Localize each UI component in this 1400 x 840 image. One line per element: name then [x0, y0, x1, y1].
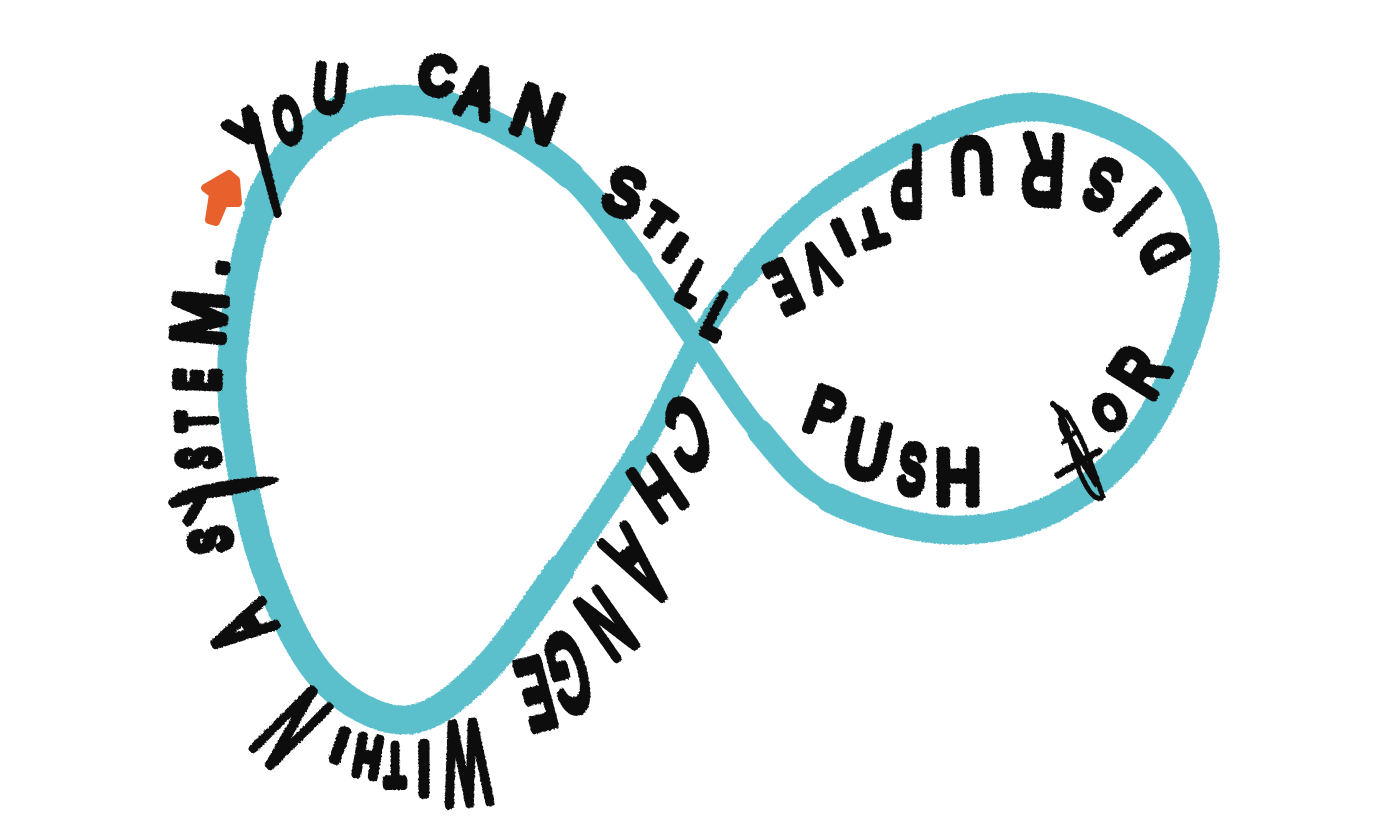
word: SYSTEM: .: [171, 255, 240, 278]
word: CHANGE: C: [656, 377, 720, 490]
word: DISRUPTIVE: V: [792, 228, 845, 303]
word: SYSTEM: S: [178, 524, 242, 556]
word: YOU: U: [311, 51, 349, 125]
word: WITHIN: N: [232, 668, 351, 787]
word: WITHIN: I: [326, 719, 354, 770]
word: WITHIN: H: [350, 724, 386, 789]
word: DISRUPTIVE: D: [1126, 222, 1200, 281]
word: WITHIN: W: [438, 698, 494, 829]
lettering group: [158, 45, 1200, 829]
word: DISRUPTIVE: P: [891, 127, 923, 235]
word: CHANGE: H: [616, 440, 699, 537]
word: YOU: [217, 51, 349, 218]
word: SYSTEM: Y: [160, 458, 244, 533]
word: DISRUPTIVE: R: [1019, 116, 1067, 224]
word: WITHIN: I: [417, 729, 431, 809]
word: DISRUPTIVE: E: [757, 246, 812, 327]
word: CHANGE: A: [585, 505, 691, 627]
word: DISRUPTIVE: T: [853, 198, 891, 256]
word: for: [1035, 334, 1184, 498]
word: CAN: C: [415, 45, 459, 107]
word: DISRUPTIVE: U: [949, 123, 995, 207]
word: A: A: [191, 590, 292, 667]
word: CAN: [415, 45, 572, 158]
word: STILL: T: [633, 195, 681, 248]
infographic: infinity loop with hand-lettered text: [168, 52, 1220, 810]
word: WITHIN: T: [385, 734, 405, 797]
infinity loop line: [232, 100, 1205, 720]
word: CHANGE: E: [508, 638, 565, 750]
word: SYSTEM: T: [167, 411, 225, 431]
word: SYSTEM: M: [158, 288, 242, 348]
word: PUSH: H: [935, 435, 981, 519]
word: STILL: [595, 154, 742, 351]
word: STILL: L: [694, 283, 742, 351]
word: CAN: N: [503, 70, 572, 158]
word: DISRUPTIVE: [757, 116, 1200, 327]
word: PUSH: S: [896, 433, 928, 508]
word: CHANGE: N: [561, 569, 651, 677]
word: SYSTEM: E: [165, 368, 230, 392]
word: PUSH: U: [837, 403, 897, 497]
word: PUSH: P: [797, 374, 853, 452]
word: WITHIN: [232, 668, 494, 829]
word: STILL: L: [668, 252, 717, 317]
word: CAN: A: [452, 54, 502, 133]
word: PUSH: [797, 374, 981, 519]
word: STILL: S: [595, 154, 653, 232]
word: DISRUPTIVE: I: [826, 210, 860, 263]
word: DISRUPTIVE: S: [1076, 145, 1129, 224]
word: for: R: [1095, 334, 1184, 410]
word: CHANGE: G: [535, 610, 602, 737]
word: SYSTEM: S: [168, 447, 230, 469]
word: for: f: [1035, 398, 1117, 487]
word: SYSTEM: [168, 260, 280, 554]
word: STILL: I: [657, 226, 693, 270]
word: YOU: Y: [217, 98, 284, 177]
word: CHANGE: [508, 377, 720, 750]
word: for: O: [1085, 384, 1135, 442]
word: YOU: O: [269, 86, 308, 157]
word: DISRUPTIVE: I: [1102, 175, 1174, 248]
icon: orange start arrow: [205, 174, 238, 222]
